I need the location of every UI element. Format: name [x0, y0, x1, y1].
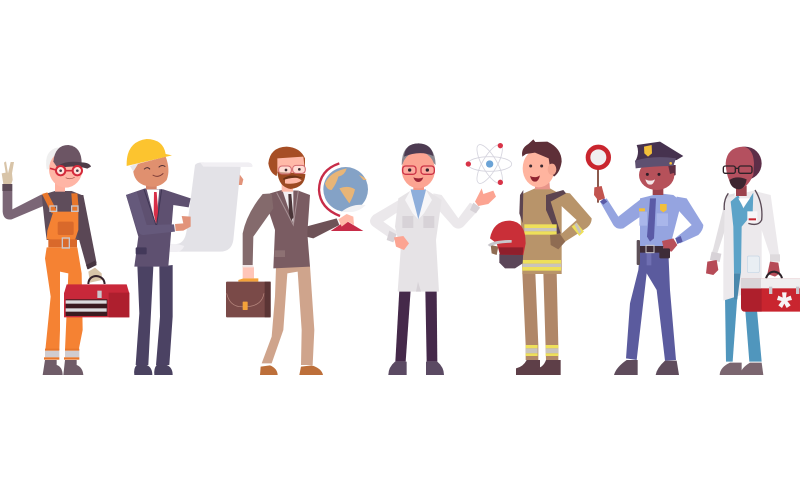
- figure: police officer holding stop paddle: [588, 142, 703, 375]
- police belt and holster: [637, 240, 670, 265]
- worker red toolbox: [64, 276, 129, 317]
- professor jacket and arms: [242, 190, 339, 268]
- doctor first aid kit: [741, 272, 800, 312]
- doctor head with glasses and beard: [723, 147, 762, 196]
- professor globe on stand: [319, 163, 368, 231]
- professor shoes: [260, 365, 323, 375]
- police head and peaked cap: [635, 142, 683, 195]
- worker orange overalls: [42, 192, 83, 360]
- figure: scientist in white lab coat: [370, 141, 512, 375]
- engineer head and hard hat: [127, 139, 172, 189]
- scientist hands: [394, 188, 496, 250]
- figure: construction worker in orange overalls: [2, 145, 129, 375]
- engineer suit jacket: [126, 188, 191, 267]
- doctor shoes: [720, 363, 763, 375]
- worker head with cap and glasses: [46, 145, 91, 192]
- police trousers: [626, 252, 676, 361]
- figure: doctor with stethoscope and first aid kit: [706, 147, 800, 375]
- doctor hands: [706, 260, 780, 277]
- scientist shoes: [388, 362, 444, 375]
- figure: engineer in suit and yellow hard hat: [126, 139, 252, 375]
- police boots: [614, 360, 679, 375]
- worker boots: [43, 360, 83, 375]
- figure: professor with globe and briefcase: [226, 147, 368, 375]
- engineer trousers: [136, 265, 173, 365]
- police blue shirt and arms: [600, 193, 703, 252]
- firefighter trousers: [522, 273, 558, 360]
- scientist head with red glasses: [402, 143, 436, 190]
- professor trousers: [262, 266, 314, 365]
- firefighter jacket with reflective stripes: [491, 188, 592, 274]
- police stop paddle: [588, 147, 609, 203]
- doctor white coat and scrubs: [710, 190, 780, 301]
- firefighter boots: [516, 360, 561, 375]
- firefighter head: [522, 139, 562, 189]
- professor hand and briefcase: [226, 267, 271, 317]
- worker torso and lowered arm: [42, 191, 102, 283]
- scientist lab coat and arms: [370, 189, 480, 292]
- worker raised arm and hand: [2, 161, 46, 220]
- engineer blueprint scroll: [168, 162, 252, 252]
- engineer shoes: [134, 365, 173, 375]
- doctor scrub trousers: [725, 297, 762, 362]
- professor head with beard and glasses: [268, 147, 305, 192]
- icon: atom: [466, 141, 512, 187]
- firefighter red helmet: [488, 221, 526, 268]
- figure: firefighter with red helmet: [488, 139, 592, 375]
- scientist trousers: [395, 290, 437, 362]
